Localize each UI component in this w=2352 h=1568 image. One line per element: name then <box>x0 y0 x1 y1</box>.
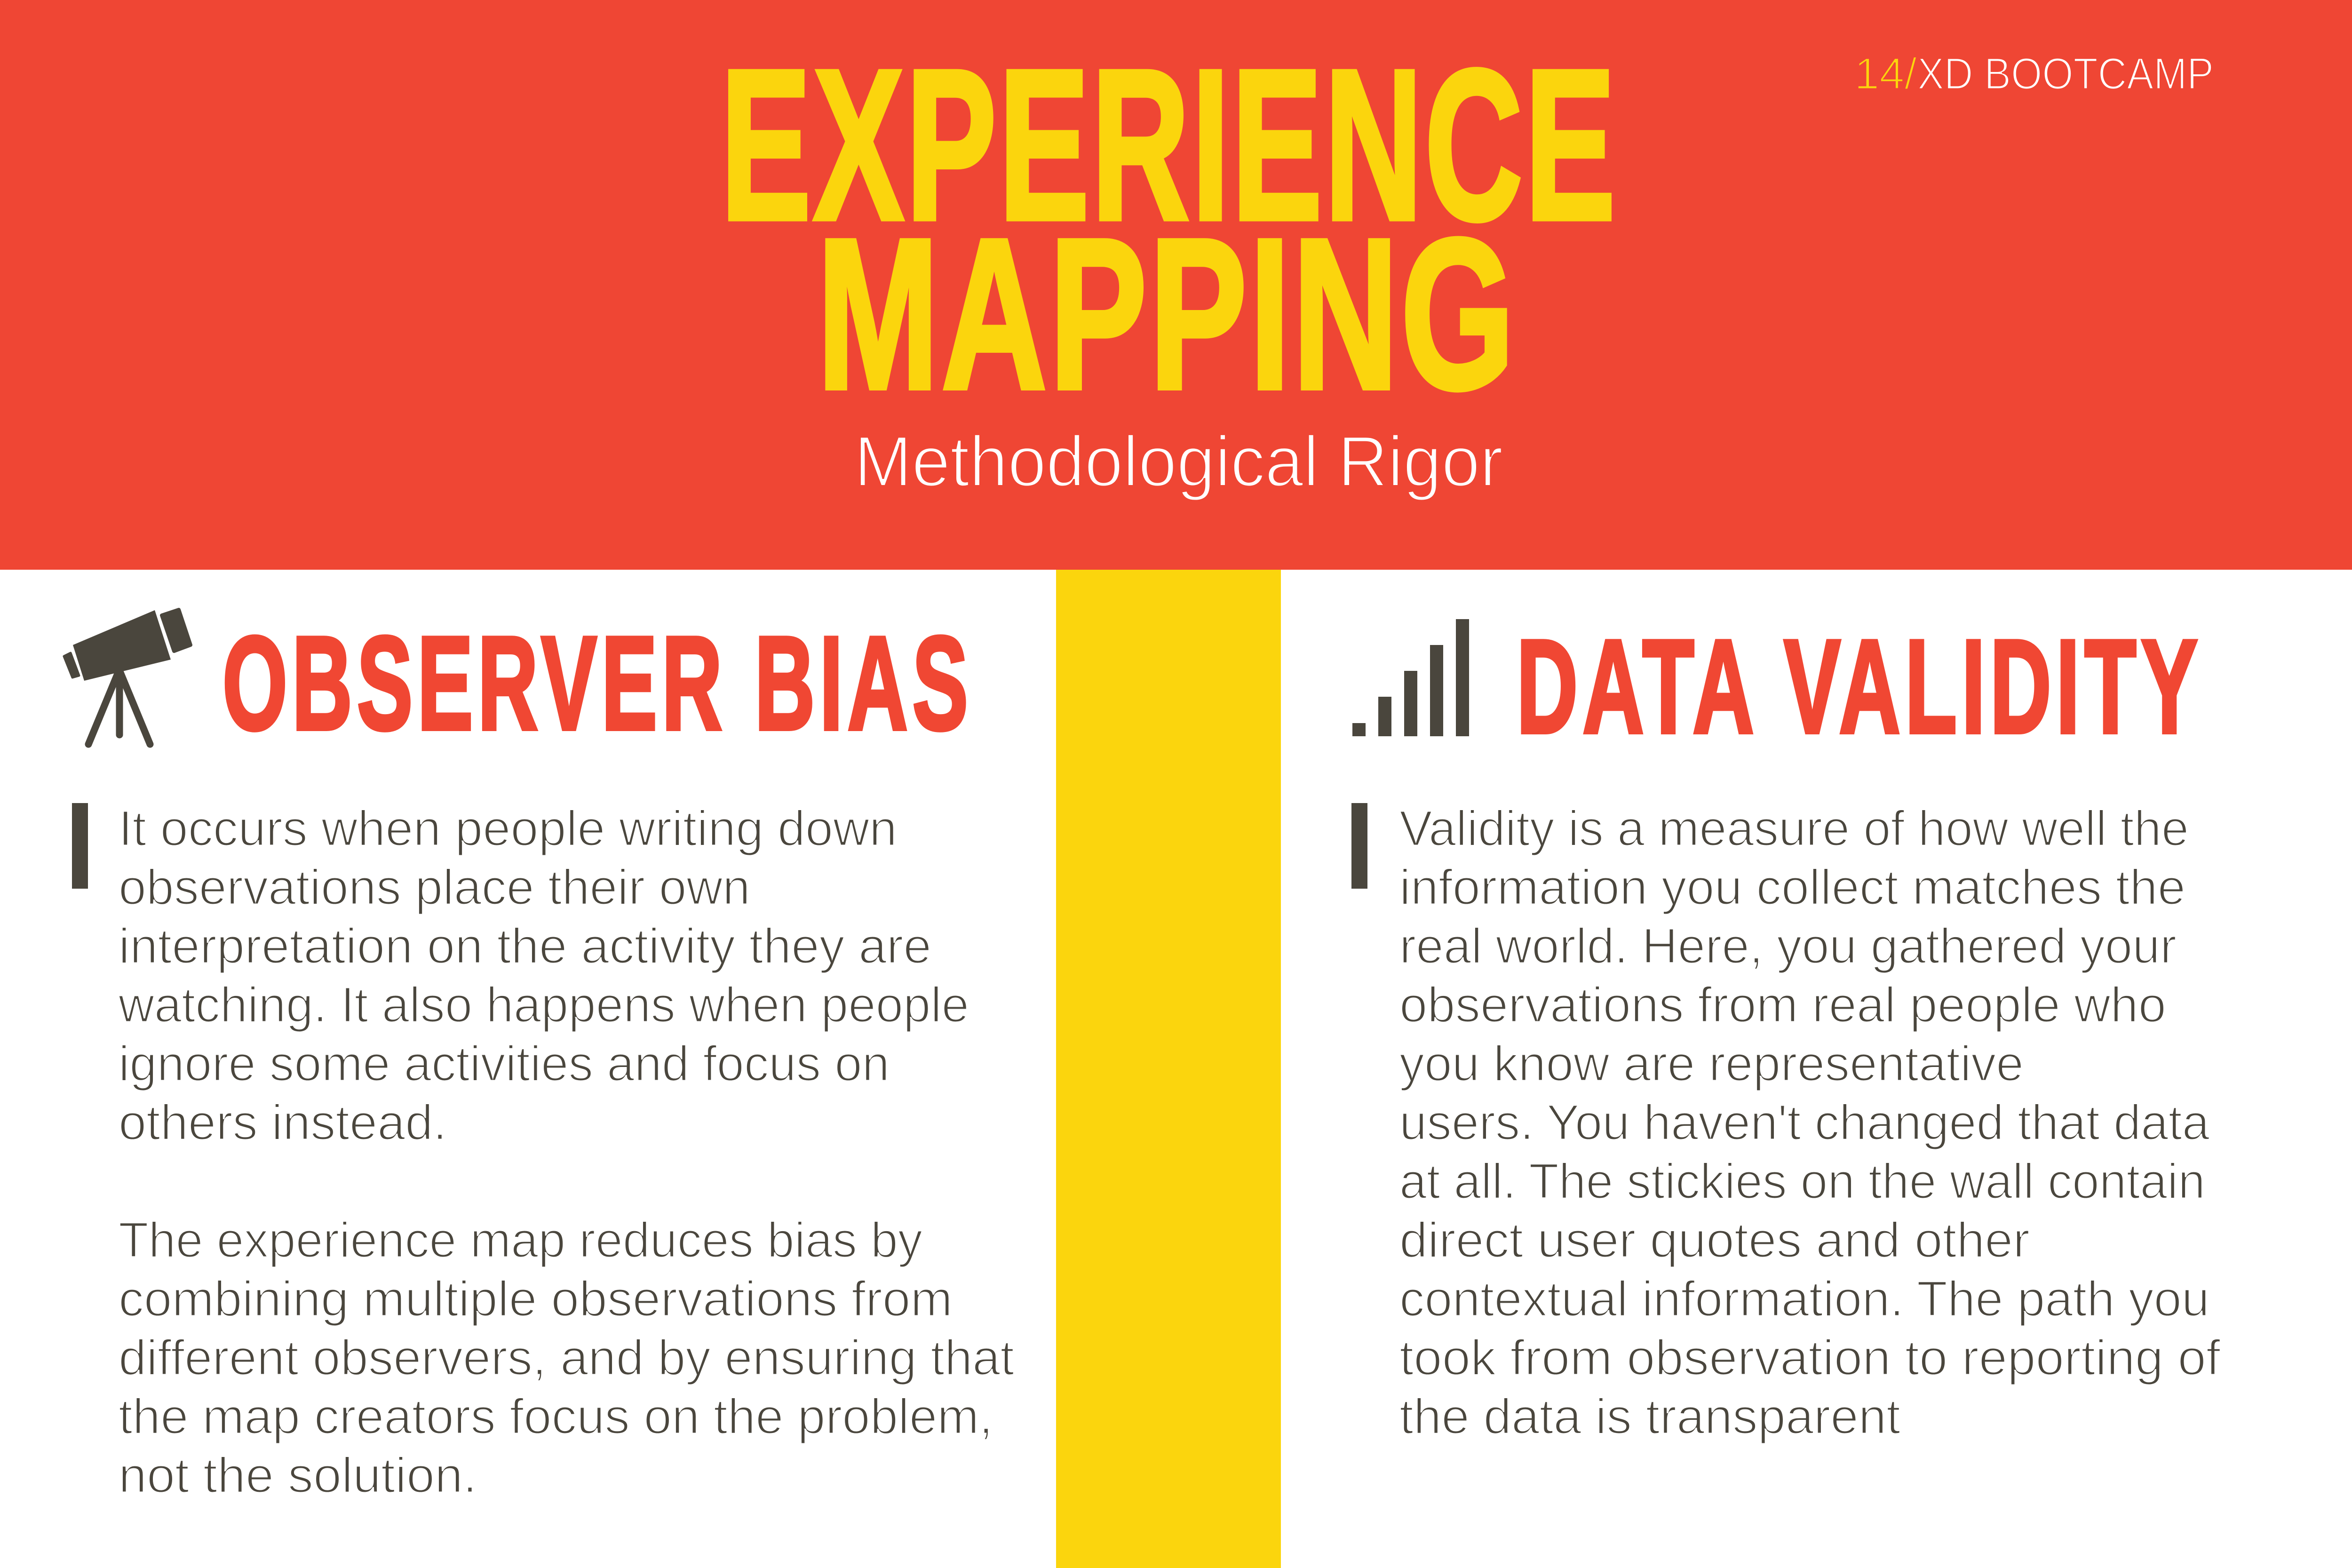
text block: observer bias: observations place their own <box>119 860 750 915</box>
accent bar: data validity <box>1351 803 1367 889</box>
text block: data validity: direct user quotes and other <box>1399 1212 2030 1268</box>
text block: observer bias: combining multiple observations from <box>119 1271 953 1327</box>
text block: data validity: took from observation to reporting of <box>1399 1330 2221 1385</box>
text block: observer bias: interpretation on the activity they are <box>119 918 931 974</box>
text block: data validity: users. You haven't changed that data <box>1399 1095 2209 1150</box>
text block: data validity: contextual information. The path you <box>1399 1271 2209 1327</box>
bootcamp label: XD BOOTCAMP <box>1917 49 2214 99</box>
text block: observer bias: watching. It also happens when people <box>118 977 969 1033</box>
centre yellow band <box>1056 570 1281 1568</box>
text block: data validity: observations from real people who <box>1399 977 2166 1033</box>
text block: observer bias: others instead. <box>119 1095 447 1150</box>
icon: telescope <box>64 610 191 744</box>
title <box>721 24 1618 434</box>
text block: observer bias <box>118 801 1014 1503</box>
text block: data validity <box>1399 801 2221 1444</box>
bootcamp label: 14/ <box>1854 49 1917 99</box>
accent bar: observer bias <box>72 803 88 889</box>
text block: observer bias: not the solution. <box>119 1448 477 1503</box>
text block: observer bias: different observers, and by ensuring that <box>119 1330 1014 1385</box>
text block: data validity: the data is transparent <box>1399 1389 1900 1444</box>
text block: observer bias: the map creators focus on the problem, <box>119 1389 993 1444</box>
text block: data validity: Validity is a measure of how well the <box>1399 801 2189 856</box>
text block: data validity: you know are representative <box>1399 1036 2024 1091</box>
text block: observer bias: ignore some activities and focus on <box>119 1036 890 1091</box>
text block: observer bias: It occurs when people writing down <box>119 801 897 856</box>
text block: data validity: information you collect matches the <box>1399 860 2185 915</box>
panel: header banner <box>0 0 2352 570</box>
heading: observer bias: OBSERVER BIAS <box>222 609 973 757</box>
title: MAPPING <box>817 194 1517 434</box>
text block: data validity: real world. Here, you gathered your <box>1399 918 2177 974</box>
icon: signal bars <box>1352 619 1469 736</box>
subtitle: Methodological Rigor <box>854 422 1503 501</box>
text block: data validity: at all. The stickies on the wall contain <box>1399 1154 2205 1209</box>
text block: observer bias: The experience map reduces bias by <box>119 1212 922 1268</box>
title: EXPERIENCE <box>721 24 1618 264</box>
